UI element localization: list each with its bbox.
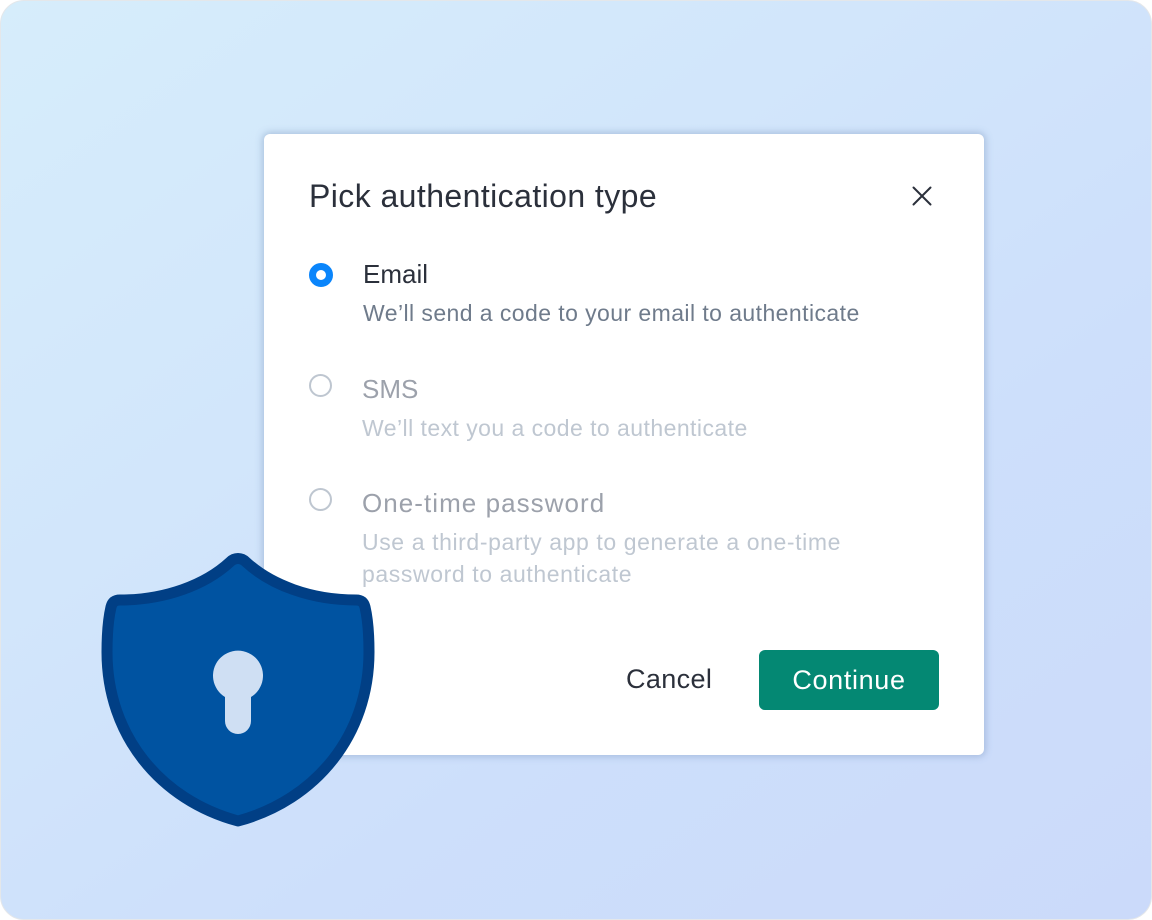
icon: close <box>912 186 932 206</box>
option description: Email: We’ll send a code to your email to authenticate <box>363 300 860 326</box>
option description: One-time password: password to authenticate <box>362 561 632 587</box>
icon: radio SMS <box>309 374 332 397</box>
option label: One-time password: One-time password <box>362 488 605 518</box>
option label: SMS: SMS <box>362 374 418 404</box>
panel: authentication dialog <box>264 134 984 755</box>
button: Cancel: Cancel <box>626 664 712 694</box>
button: Continue: Continue <box>792 665 906 695</box>
heading: Pick authentication type: Pick authentication type <box>309 178 657 214</box>
button: Continue <box>759 650 939 710</box>
icon: radio One-time password <box>309 488 332 511</box>
option description: One-time password <box>362 529 841 587</box>
icon: selected radio Email <box>309 263 333 287</box>
option description: One-time password: Use a third-party app to generate a one-time <box>362 529 841 555</box>
option label: Email: Email <box>363 259 428 289</box>
option description: SMS: We’ll text you a code to authenticate <box>362 415 748 441</box>
